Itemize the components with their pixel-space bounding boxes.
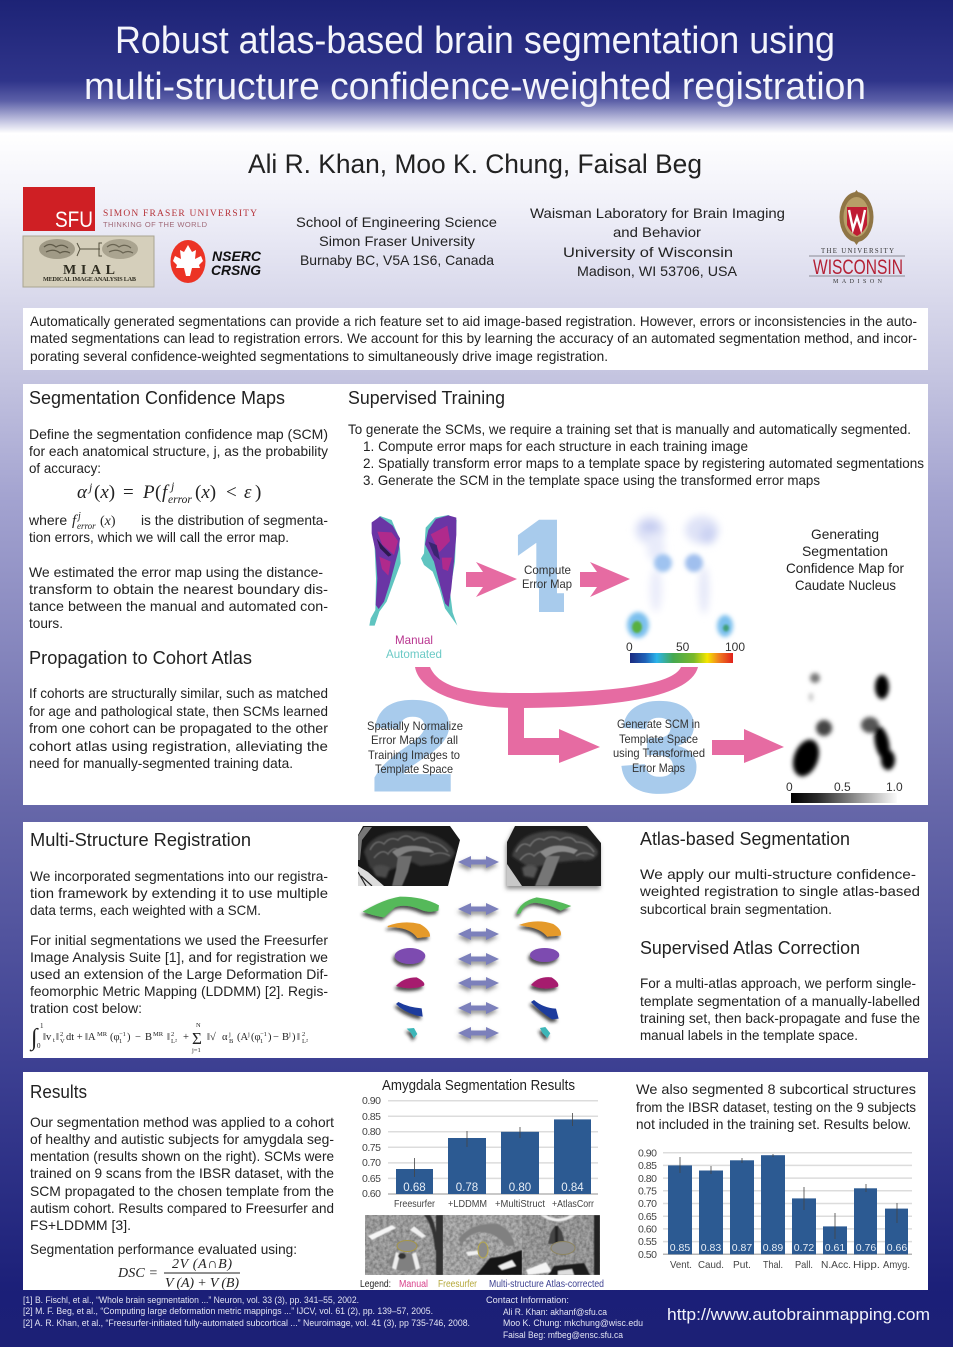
logo: Medical Image Analysis Lab: MEDICAL IMAGE ANALYSIS LAB — [43, 276, 136, 283]
logo: Simon Fraser University: SIMON FRASER UNIVERSITY — [103, 209, 257, 219]
chart: subcortical structure results: 0.80 — [638, 1173, 657, 1185]
logo: University of Wisconsin — [809, 190, 905, 285]
image: template MRI — [507, 826, 601, 886]
heading: segmentation confidence maps: Segmentation Confidence Maps — [29, 387, 285, 408]
chart: amygdala segmentation results: +MultiStruct — [495, 1198, 545, 1210]
label: generate SCM: Template Space — [619, 732, 698, 746]
chart: amygdala segmentation results: 0.78 — [456, 1182, 478, 1194]
text: distance transform: tance between the manual and automated con- — [29, 598, 328, 614]
label: compute error map — [522, 563, 572, 591]
label: compute error map: Error Map — [522, 577, 572, 591]
colour bar: confidence scale: 1.0 — [886, 780, 903, 794]
formula: confidence map: j — [169, 479, 175, 493]
legend: MRI contours — [360, 1279, 604, 1290]
legend: MRI contours: Legend: — [360, 1279, 391, 1290]
label: generate SCM — [613, 717, 705, 775]
chart: subcortical structure results: 0.90 — [638, 1148, 657, 1160]
formula: registration cost: α — [222, 1032, 228, 1043]
contact information: Moo K. Chung: mkchung@wisc.edu — [503, 1318, 643, 1329]
chart: subcortical structure results: 0.87 — [732, 1242, 752, 1254]
text: SCM definition — [29, 426, 328, 476]
formula: confidence map: ) — [255, 482, 261, 503]
logo: NSERC CRSNG: NSERC — [212, 248, 262, 264]
text: freesurfer and LDDMM: tration cost below: — [30, 1000, 142, 1016]
text: SCM definition: of accuracy: — [29, 460, 101, 476]
formula: registration cost: + — [183, 1032, 189, 1043]
formula: Dice similarity coefficient: DSC = — [117, 1266, 158, 1281]
step number 3: 3 — [620, 676, 700, 818]
text: training steps: 1. Compute error maps for each structure in each training image — [363, 438, 748, 454]
formula: registration cost: j — [247, 1031, 250, 1038]
text: error map definition: tion errors, which we will call the error map. — [29, 529, 289, 545]
formula: registration cost: ) — [127, 1032, 131, 1043]
text: propagation — [29, 685, 328, 771]
text: atlas-based segmentation: subcortical brain segmentation. — [640, 901, 832, 917]
chart: amygdala segmentation results: 0.80 — [362, 1126, 381, 1138]
chart: amygdala segmentation results: 0.60 — [362, 1188, 381, 1200]
text: error map definition: f — [72, 513, 78, 529]
address: Simon Fraser University: Burnaby BC, V5A 1S6, Canada — [300, 252, 494, 268]
formula: registration cost: ) — [268, 1032, 272, 1043]
formula: registration cost: 0 — [37, 1042, 41, 1050]
chart: amygdala segmentation results: 0.68 — [403, 1182, 426, 1194]
formula: Dice similarity coefficient: 2V (A∩B) — [172, 1257, 232, 1272]
logo: University of Wisconsin: MADISON — [833, 279, 883, 285]
formula: registration cost: t — [53, 1037, 55, 1044]
chart: subcortical structure results: Thal. — [763, 1259, 783, 1271]
address: University of Wisconsin: Madison, WI 53706, USA — [577, 263, 738, 279]
text: training steps — [348, 421, 924, 488]
formula: registration cost: (φ — [110, 1032, 120, 1043]
chart: amygdala segmentation results: 0.80 — [509, 1182, 531, 1194]
formula: registration cost: ‖ — [56, 1032, 59, 1043]
logo: University of Wisconsin: THE UNIVERSITY — [821, 248, 894, 255]
chart: subcortical structure results: 0.61 — [825, 1242, 845, 1254]
icon: registration arrows — [458, 856, 499, 1039]
chart: grayscale confidence map — [788, 673, 895, 780]
address: University of Wisconsin: University of Wisconsin — [563, 244, 733, 260]
formula: registration cost: B — [145, 1032, 152, 1043]
text: freesurfer and LDDMM: used an extension of the Large Deformation Dif- — [30, 966, 328, 982]
step number 1: 1 — [513, 497, 575, 636]
text: error map definition: (x) — [100, 514, 116, 529]
label: spatially normalize: Spatially Normalize — [367, 719, 463, 733]
chart: subcortical structure results: 0.85 — [638, 1160, 657, 1172]
formula: confidence map: (x) — [195, 482, 216, 503]
chart: subcortical structure results: 0.83 — [701, 1242, 721, 1254]
chart: subcortical structure results — [638, 1148, 912, 1271]
heading: supervised training: Supervised Training — [348, 387, 505, 408]
panel: confidence maps and supervised training — [23, 384, 928, 818]
panel: registration and atlas segmentation — [23, 822, 928, 1058]
chart: amygdala segmentation results: Amygdala Segmentation Results — [382, 1078, 575, 1094]
label: spatially normalize: Training Images to — [368, 748, 460, 762]
formula: registration cost: 2 — [60, 1031, 63, 1038]
colour bar: confidence scale: 0 — [786, 780, 793, 794]
logo: NSERC CRSNG: CRSNG — [211, 262, 261, 278]
text: results description — [30, 1114, 334, 1257]
text: subcortical structures — [636, 1081, 916, 1132]
arrow: compute step to error map — [580, 562, 630, 597]
chart: amygdala segmentation results: 0.75 — [362, 1142, 381, 1154]
text: registration framework: We incorporated segmentations into our registra- — [30, 868, 328, 884]
text: results description: SCM propagated to the chosen template from the — [30, 1183, 334, 1199]
title: multi-structure confidence-weighted registration — [84, 66, 866, 108]
chart: subcortical structure results: 0.60 — [638, 1224, 657, 1236]
chart: amygdala segmentation results — [362, 1078, 598, 1210]
panel: abstract — [23, 308, 928, 370]
arrow: surfaces to compute step — [466, 562, 517, 597]
text: SCM definition: for each anatomical structure, j, as the probability — [29, 443, 328, 459]
formula: confidence map: error — [168, 494, 192, 506]
colour bar: error percentage: 50 — [676, 640, 690, 654]
text: freesurfer and LDDMM: For initial segmentations we used the Freesurfer — [30, 932, 328, 948]
title: Robust atlas-based brain segmentation using — [115, 20, 835, 62]
formula: registration cost: MR — [153, 1031, 164, 1038]
label: generating segmentation confidence map: Segmentation — [802, 543, 888, 559]
chart: subcortical structure results: 0.72 — [794, 1242, 814, 1254]
text: error map definition: where — [28, 512, 67, 528]
panel: results — [23, 1072, 928, 1291]
formula: registration cost: − — [273, 1032, 279, 1043]
formula: registration cost: ‖ — [297, 1032, 300, 1043]
label: spatially normalize: Error Maps for all — [371, 733, 458, 747]
text: supervised atlas correction: template segmentation of a manually-labelled — [640, 993, 920, 1009]
chart: subcortical structure results: 0.65 — [638, 1211, 657, 1223]
formula: registration cost: B — [229, 1038, 234, 1045]
contact information: Faisal Beg: mfbeg@ensc.sfu.ca — [503, 1330, 624, 1341]
text: distance transform — [29, 564, 328, 631]
formula: registration cost: ) — [292, 1032, 296, 1043]
legend: MRI contours: Freesurfer — [438, 1279, 478, 1290]
formula: confidence map: = — [123, 482, 134, 503]
label: generate SCM: Generate SCM in — [617, 717, 700, 731]
chart: amygdala segmentation results: 0.85 — [362, 1111, 381, 1123]
text: propagation: cohort atlas using registration, alleviating the — [29, 738, 328, 754]
chart: amygdala segmentation results: 0.65 — [362, 1173, 381, 1185]
formula: registration cost: 2 — [302, 1031, 305, 1038]
chart: amygdala segmentation results: 0.90 — [362, 1095, 381, 1107]
text: training steps: 2. Spatially transform error maps to a template space by registering automated segmentations — [363, 455, 924, 471]
formula: Dice similarity coefficient — [117, 1257, 240, 1291]
chart: subcortical structure results: 0.89 — [763, 1242, 783, 1254]
text: subcortical structures: We also segmented 8 subcortical structures — [636, 1081, 916, 1097]
label: manual and automated: Manual — [395, 633, 433, 647]
formula: Dice similarity coefficient: V (A) + V (B) — [165, 1276, 239, 1291]
logo: University of Wisconsin: WISCONSIN — [813, 256, 903, 279]
chart: subcortical structure results: Hipp. — [853, 1259, 880, 1271]
formula: confidence map: ( — [155, 482, 161, 503]
chart: subcortical structure results: Caud. — [698, 1259, 724, 1271]
text: results description: Segmentation performance evaluated using: — [30, 1241, 297, 1257]
text: results description: of healthy and autistic subjects for amygdala seg- — [30, 1131, 334, 1147]
formula: confidence map — [77, 479, 261, 506]
chart: subcortical structure results: Pall. — [795, 1259, 813, 1271]
text: propagation: need for manually-segmented training data. — [29, 755, 293, 771]
label: generating segmentation confidence map: Generating — [811, 526, 879, 542]
formula: registration cost: V — [60, 1038, 65, 1045]
label: spatially normalize: Template Space — [375, 762, 453, 776]
formula: registration cost: B — [282, 1032, 289, 1043]
references: [1] B. Fischl, et al., “Whole brain segmentation ...” Neuron, vol. 33 (3), pp. 341–55, 2002. — [23, 1295, 359, 1306]
text: distance transform: transform to obtain the nearest boundary dis- — [29, 581, 328, 597]
formula: registration cost: 1 — [40, 1022, 44, 1030]
text: training steps: 3. Generate the SCM in the template space using the transformed error maps — [363, 472, 820, 488]
colour bar: error percentage — [626, 640, 745, 663]
label: generating segmentation confidence map: Caudate Nucleus — [795, 577, 896, 593]
chart: subcortical structure results: 0.75 — [638, 1186, 657, 1198]
chart: amygdala segmentation results: +AtlasCorr — [552, 1198, 594, 1210]
formula: registration cost: 1 — [260, 1038, 263, 1045]
formula: confidence map: f — [162, 482, 170, 503]
heading: supervised atlas correction: Supervised Atlas Correction — [640, 937, 860, 958]
text: error map definition: is the distribution of segmenta- — [141, 512, 328, 528]
contact information: Ali R. Khan: akhanf@sfu.ca — [503, 1307, 608, 1318]
logo: Medical Image Analysis Lab: MIAL — [63, 263, 115, 278]
formula: confidence map: j — [87, 480, 93, 494]
authors: Ali R. Khan, Moo K. Chung, Faisal Beg — [248, 149, 702, 179]
text: distance transform: tours. — [29, 615, 63, 631]
heading: atlas-based segmentation: Atlas-based Segmentation — [640, 828, 850, 849]
formula: confidence map: (x) — [94, 482, 115, 503]
text: atlas-based segmentation — [639, 866, 920, 917]
formula: confidence map: < — [226, 482, 237, 503]
label: compute error map: Compute — [524, 563, 571, 577]
formula: registration cost — [29, 1022, 308, 1054]
chart: subcortical structure results: 0.55 — [638, 1236, 657, 1248]
heading: propagation to cohort atlas: Propagation to Cohort Atlas — [29, 647, 252, 668]
formula: registration cost: dt + — [66, 1032, 83, 1043]
text: freesurfer and LDDMM: Image Analysis Suite [1], and for registration we — [30, 949, 328, 965]
formula: registration cost: ‖ — [167, 1032, 170, 1043]
formula: registration cost: −1 — [119, 1031, 126, 1038]
chart: subcortical structure results: 0.70 — [638, 1198, 657, 1210]
formula: registration cost: L² — [171, 1038, 177, 1045]
formula: registration cost: 2 — [171, 1031, 174, 1038]
text: distance transform: We estimated the error map using the distance- — [29, 564, 323, 580]
formula: registration cost: −1 — [260, 1031, 267, 1038]
text: registration framework: data terms, each weighted with a SCM. — [30, 902, 261, 918]
references: [2] A. R. Khan, et al., “Freesurfer-initiated fully-automated subcortical ...” Neuroimage, vol. 41 (3), pp 735-746, 2008. — [23, 1318, 470, 1329]
text: freesurfer and LDDMM: feomorphic Metric Mapping (LDDMM) [2]. Regis- — [30, 983, 328, 999]
address: Simon Fraser University — [296, 214, 497, 268]
arrow: to confidence map — [712, 729, 784, 763]
panel: abstract: Automatically generated segmentations can provide a rich feature set to aid image-based registration. However, errors or inconsistencies in the auto- — [30, 313, 917, 329]
image: sagittal MRI — [443, 1215, 522, 1275]
chart: subcortical structure results: 0.66 — [887, 1242, 907, 1254]
panel: abstract: porating several confidence-weighted segmentations to simultaneously drive image registration. — [30, 348, 608, 364]
chart: amygdala segmentation results: 0.70 — [362, 1157, 381, 1169]
text: error map definition: j — [76, 511, 81, 522]
text: error map definition: error — [77, 521, 96, 531]
chart: subcortical structure results: Put. — [733, 1259, 751, 1271]
chart: subcortical structure results: 0.50 — [638, 1249, 657, 1261]
chart: amygdala segmentation results: +LDDMM — [448, 1198, 487, 1210]
address: University of Wisconsin: and Behavior — [613, 224, 701, 240]
chart: subcortical structure results: Vent. — [670, 1259, 692, 1271]
formula: confidence map: α — [77, 482, 88, 503]
chart: subcortical structure results: 0.85 — [670, 1242, 690, 1254]
chart: subcortical structure results: N.Acc. — [821, 1259, 851, 1271]
formula: registration cost: (φ — [251, 1032, 261, 1043]
references: [2] M. F. Beg, et al., “Computing large deformation metric mappings ...” IJCV, vol. 61 (2), pp. 139–57, 2005. — [23, 1306, 433, 1317]
text: propagation: from one cohort can be propagated to the other — [29, 720, 328, 736]
logo: Simon Fraser University: THINKING OF THE WORLD — [103, 220, 208, 229]
text: SCM definition: Define the segmentation confidence map (SCM) — [29, 426, 328, 442]
chart: subcortical structure results: Amyg. — [883, 1259, 910, 1271]
text: registration framework: tion framework by extending it to use multiple — [30, 885, 328, 901]
chart: error heat map — [627, 516, 733, 638]
heading: multi-structure registration: Multi-Structure Registration — [30, 829, 251, 850]
text: propagation: If cohorts are structurally similar, such as matched — [29, 685, 328, 701]
label: generating segmentation confidence map: Confidence Map for — [786, 560, 904, 576]
formula: registration cost: − — [135, 1032, 141, 1043]
formula: registration cost: Σ — [192, 1029, 202, 1048]
label: generate SCM: Error Maps — [632, 761, 685, 775]
address: University of Wisconsin: Waisman Laboratory for Brain Imaging — [530, 205, 785, 221]
heading: results: Results — [30, 1081, 87, 1102]
legend: MRI contours: Manual — [399, 1279, 428, 1290]
text: registration framework — [30, 868, 328, 918]
text: freesurfer and LDDMM — [30, 932, 328, 1016]
chart: amygdala segmentation results: 0.84 — [561, 1182, 584, 1194]
image: axial MRI — [365, 1215, 443, 1275]
step number 2: 2 — [371, 675, 455, 817]
colour bar: error percentage: 0 — [626, 640, 633, 654]
text: training steps: To generate the SCMs, we require a training set that is manually and automatically segmented. — [348, 421, 911, 437]
text: subcortical structures: not included in the training set. Results below. — [636, 1116, 911, 1132]
label: manual and automated — [386, 633, 442, 661]
logo: Simon Fraser University: SFU — [55, 207, 93, 232]
text: results description: Our segmentation method was applied to a cohort — [30, 1114, 334, 1130]
formula: registration cost: ‖√ — [207, 1031, 216, 1043]
text: results description: mentation (results shown on the right). SCMs were — [30, 1148, 334, 1164]
address: University of Wisconsin — [530, 205, 785, 279]
text: propagation: for age and pathological state, then SCMs learned — [29, 703, 328, 719]
formula: registration cost: ‖v — [43, 1032, 52, 1043]
logo: NSERC CRSNG — [170, 240, 262, 283]
image: coronal MRI — [522, 1215, 600, 1275]
panel: abstract: mated segmentations can lead to registration errors. We account for this by learning the accuracy of an automated segmentation method, and incor- — [30, 330, 917, 346]
title — [84, 20, 866, 108]
text: supervised atlas correction: training set, then back-propagate and fuse the — [640, 1010, 920, 1026]
colour bar: error percentage: 100 — [725, 640, 745, 654]
formula: registration cost: L² — [302, 1038, 308, 1045]
formula: confidence map: P — [142, 482, 155, 503]
chart: amygdala segmentation results: Freesurfer — [394, 1198, 435, 1210]
icon: segmented brain structures — [363, 897, 571, 1038]
logo: Medical Image Analysis Lab — [23, 236, 154, 287]
contact information — [486, 1295, 643, 1341]
icon: caudate surfaces — [369, 515, 457, 626]
formula: registration cost: (A — [237, 1032, 248, 1043]
formula: registration cost: MR — [97, 1031, 108, 1038]
text: error map definition — [28, 511, 328, 545]
label: generating segmentation confidence map — [786, 526, 904, 593]
label: generate SCM: using Transformed — [613, 746, 705, 760]
formula: registration cost: j — [228, 1031, 231, 1038]
label: spatially normalize — [367, 719, 463, 776]
label: manual and automated: Automated — [386, 647, 442, 661]
legend: MRI contours: Multi-structure Atlas-corrected — [489, 1279, 604, 1290]
chart: subcortical structure results: 0.76 — [856, 1242, 876, 1254]
text: atlas-based segmentation: weighted registration to single atlas-based — [639, 883, 920, 899]
text: results description: trained on 9 scans from the IBSR dataset, with the — [30, 1165, 334, 1181]
text: subcortical structures: from the IBSR dataset, testing on the 9 subjects — [636, 1099, 916, 1115]
formula: registration cost: N — [196, 1022, 201, 1029]
logo: Simon Fraser University — [23, 187, 257, 232]
address: Simon Fraser University: School of Engineering Science — [296, 214, 497, 230]
formula: registration cost: j — [288, 1031, 291, 1038]
text: atlas-based segmentation: We apply our multi-structure confidence- — [640, 866, 916, 882]
text: results description: autism cohort. Results compared to Freesurfer and — [30, 1200, 334, 1216]
text: supervised atlas correction — [640, 975, 920, 1043]
colour bar: confidence scale: 0.5 — [834, 780, 851, 794]
references — [23, 1295, 470, 1329]
text: results description: FS+LDDMM [3]. — [30, 1217, 131, 1233]
text: supervised atlas correction: manual labels in the template space. — [640, 1027, 858, 1043]
text: supervised atlas correction: For a multi-atlas approach, we perform single- — [640, 975, 916, 991]
website URL: http://www.autobrainmapping.com — [667, 1305, 930, 1324]
contact information: Contact Information: — [486, 1295, 569, 1306]
formula: registration cost: ‖A — [85, 1032, 96, 1043]
formula: registration cost: ∫ — [29, 1025, 39, 1052]
image: moving MRI — [358, 826, 460, 886]
formula: registration cost: j=1 — [191, 1047, 201, 1054]
address: Simon Fraser University: Simon Fraser University — [319, 233, 475, 249]
arrow: curved merge — [415, 667, 698, 763]
formula: confidence map: ε — [244, 482, 252, 503]
formula: registration cost: 1 — [119, 1038, 122, 1045]
colour bar: confidence scale — [786, 780, 903, 803]
